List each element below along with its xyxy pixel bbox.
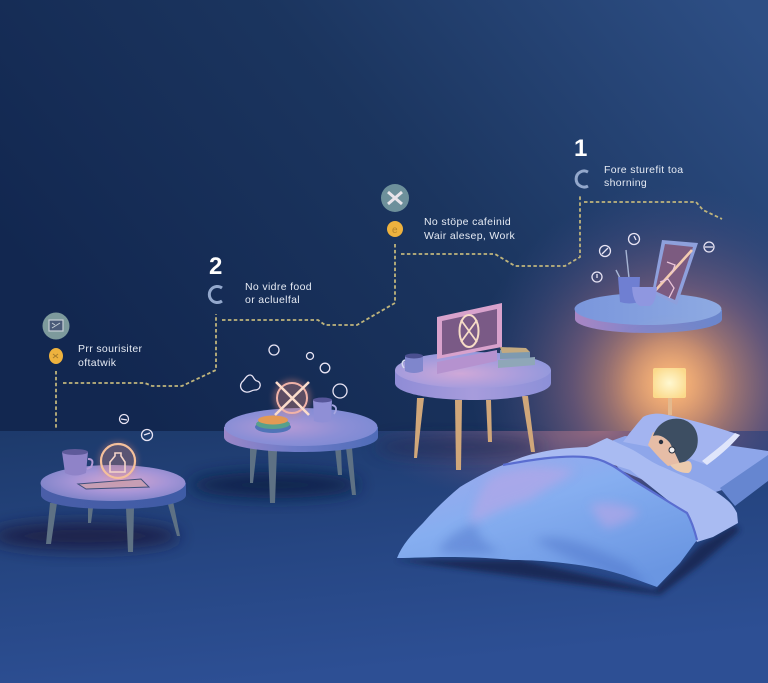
table top — [40, 465, 186, 509]
blanket upper fold — [503, 438, 738, 542]
small floating icons — [592, 234, 714, 282]
icon: yellow coin — [49, 348, 63, 364]
table 4 shadow — [0, 522, 180, 550]
table legs — [46, 501, 180, 552]
table legs — [414, 396, 535, 470]
monitor — [437, 303, 502, 374]
text block: step 4: Prr sourisiter — [78, 343, 143, 355]
table top — [395, 352, 551, 400]
mattress top — [600, 436, 768, 500]
bowl — [632, 287, 657, 306]
icon: yellow coin: e — [392, 225, 398, 236]
bed and sleeper — [397, 414, 768, 590]
pillow — [623, 414, 740, 465]
text block: step 3: No stöpe cafeinid — [424, 216, 511, 228]
lamp wall glow — [470, 185, 768, 431]
step 3 label group — [381, 184, 516, 242]
blanket hem line — [503, 457, 697, 540]
text block: step 2: or acluelfal — [245, 294, 300, 306]
text block: step 1: shorning — [604, 177, 647, 189]
step 1 label group — [574, 135, 683, 189]
table 2 shadow — [375, 436, 545, 458]
blanket body — [397, 457, 697, 587]
blanket folds — [440, 465, 642, 581]
glowing icon: no device — [98, 441, 138, 481]
table with monitor — [395, 303, 551, 470]
icon: mug — [402, 354, 423, 373]
small floating food icons — [241, 345, 347, 398]
small floating icons — [120, 414, 152, 440]
table top — [574, 293, 722, 333]
sleeper face — [648, 432, 690, 466]
step 2 label group — [209, 253, 312, 306]
bedside lamp — [640, 352, 700, 415]
step 4 label group — [42, 312, 143, 369]
icon: mug — [313, 398, 336, 422]
fold shadows — [440, 524, 642, 581]
table with food — [224, 345, 378, 503]
sleeper hair — [653, 419, 698, 464]
text block: step 3: Wair alesep, Work — [424, 230, 516, 242]
food plate stack — [255, 416, 291, 433]
tablet — [78, 479, 149, 489]
table left with tablet — [40, 414, 186, 552]
number 1: 1 — [574, 135, 587, 162]
background wall — [0, 0, 768, 431]
glowing icon: crossed circle — [273, 379, 311, 417]
bed shadow — [395, 525, 740, 595]
sleeper eyes — [659, 440, 675, 453]
no-phone frame — [652, 240, 698, 305]
icon: crescent moon — [209, 286, 222, 302]
icon: monitor badge — [42, 312, 70, 340]
number 2: 2 — [209, 253, 222, 280]
mattress side — [720, 455, 768, 506]
text block: step 1: Fore sturefit toa — [604, 164, 683, 176]
sleeper hand — [670, 461, 692, 473]
floor glow — [360, 431, 768, 516]
icon: mug — [62, 449, 92, 476]
dashed path connector — [56, 194, 722, 430]
floating table with items — [574, 234, 722, 333]
icon: crossed badge — [381, 184, 409, 212]
books — [498, 347, 535, 368]
text block: step 2: No vidre food — [245, 281, 312, 293]
pencil cup — [616, 250, 640, 304]
fold highlights — [470, 467, 640, 528]
text block: step 4: oftatwik — [78, 357, 117, 369]
table 3 shadow — [190, 472, 360, 498]
table top — [224, 408, 378, 452]
floor — [0, 431, 768, 683]
table legs — [250, 448, 356, 503]
glowing icon: crossed circle — [460, 315, 478, 347]
icon: crescent moon — [576, 171, 588, 187]
